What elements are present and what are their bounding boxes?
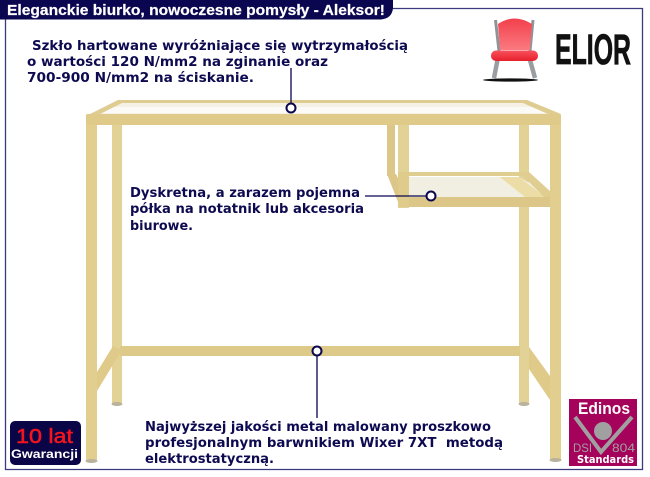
callout: metal: profesjonalnym barwnikiem Wixer 7XT metodą [145, 436, 503, 451]
shelf glass [409, 177, 545, 197]
badge: Edinos standards [569, 399, 637, 466]
badge: Edinos standards: 804 [612, 443, 636, 455]
callout: glass: 700-900 N/mm2 na ściskanie. [27, 71, 254, 86]
rear leg feet [112, 402, 530, 406]
desk illustration [86, 100, 562, 463]
callout: metal: Najwyższej jakości metal malowany proszkowo [145, 420, 491, 435]
desk top front bar [86, 114, 561, 125]
callout: glass: Szkło hartowane wyróżniające się wytrzymałością [32, 39, 408, 54]
front leg feet [86, 458, 562, 463]
badge: 10 lat warranty: 10 lat [16, 426, 74, 448]
badge: 10 lat warranty [10, 421, 81, 465]
shelf frame [409, 172, 551, 198]
callout: shelf: półka na notatnik lub akcesoria [130, 202, 364, 217]
badge: Edinos standards: Edinos [578, 399, 630, 418]
shelf rear legs [387, 124, 409, 208]
desk glass top [100, 101, 549, 114]
callout: glass: o wartości 120 N/mm2 na zginanie oraz [27, 55, 328, 70]
callout: glass [27, 39, 408, 112]
lower side braces [97, 346, 550, 400]
lower rear bar [120, 346, 520, 356]
icon: red chair [483, 18, 538, 82]
badge: Edinos standards: Standards [577, 453, 634, 466]
rear legs [112, 124, 529, 404]
callout: shelf: biurowe. [130, 219, 193, 234]
desk top back and side rails [86, 100, 561, 116]
badge: Edinos standards: DSI [573, 443, 592, 455]
callout: metal [145, 346, 503, 467]
callout: shelf: Dyskretna, a zarazem pojemna [130, 186, 360, 201]
badge: 10 lat warranty: Gwarancji [11, 447, 78, 461]
callout: metal: elektrostatyczną. [145, 452, 274, 467]
title bar: Eleganckie biurko, nowoczesne pomysły - Aleksor! [7, 3, 385, 19]
front legs [86, 118, 561, 460]
callout: shelf [130, 186, 436, 234]
